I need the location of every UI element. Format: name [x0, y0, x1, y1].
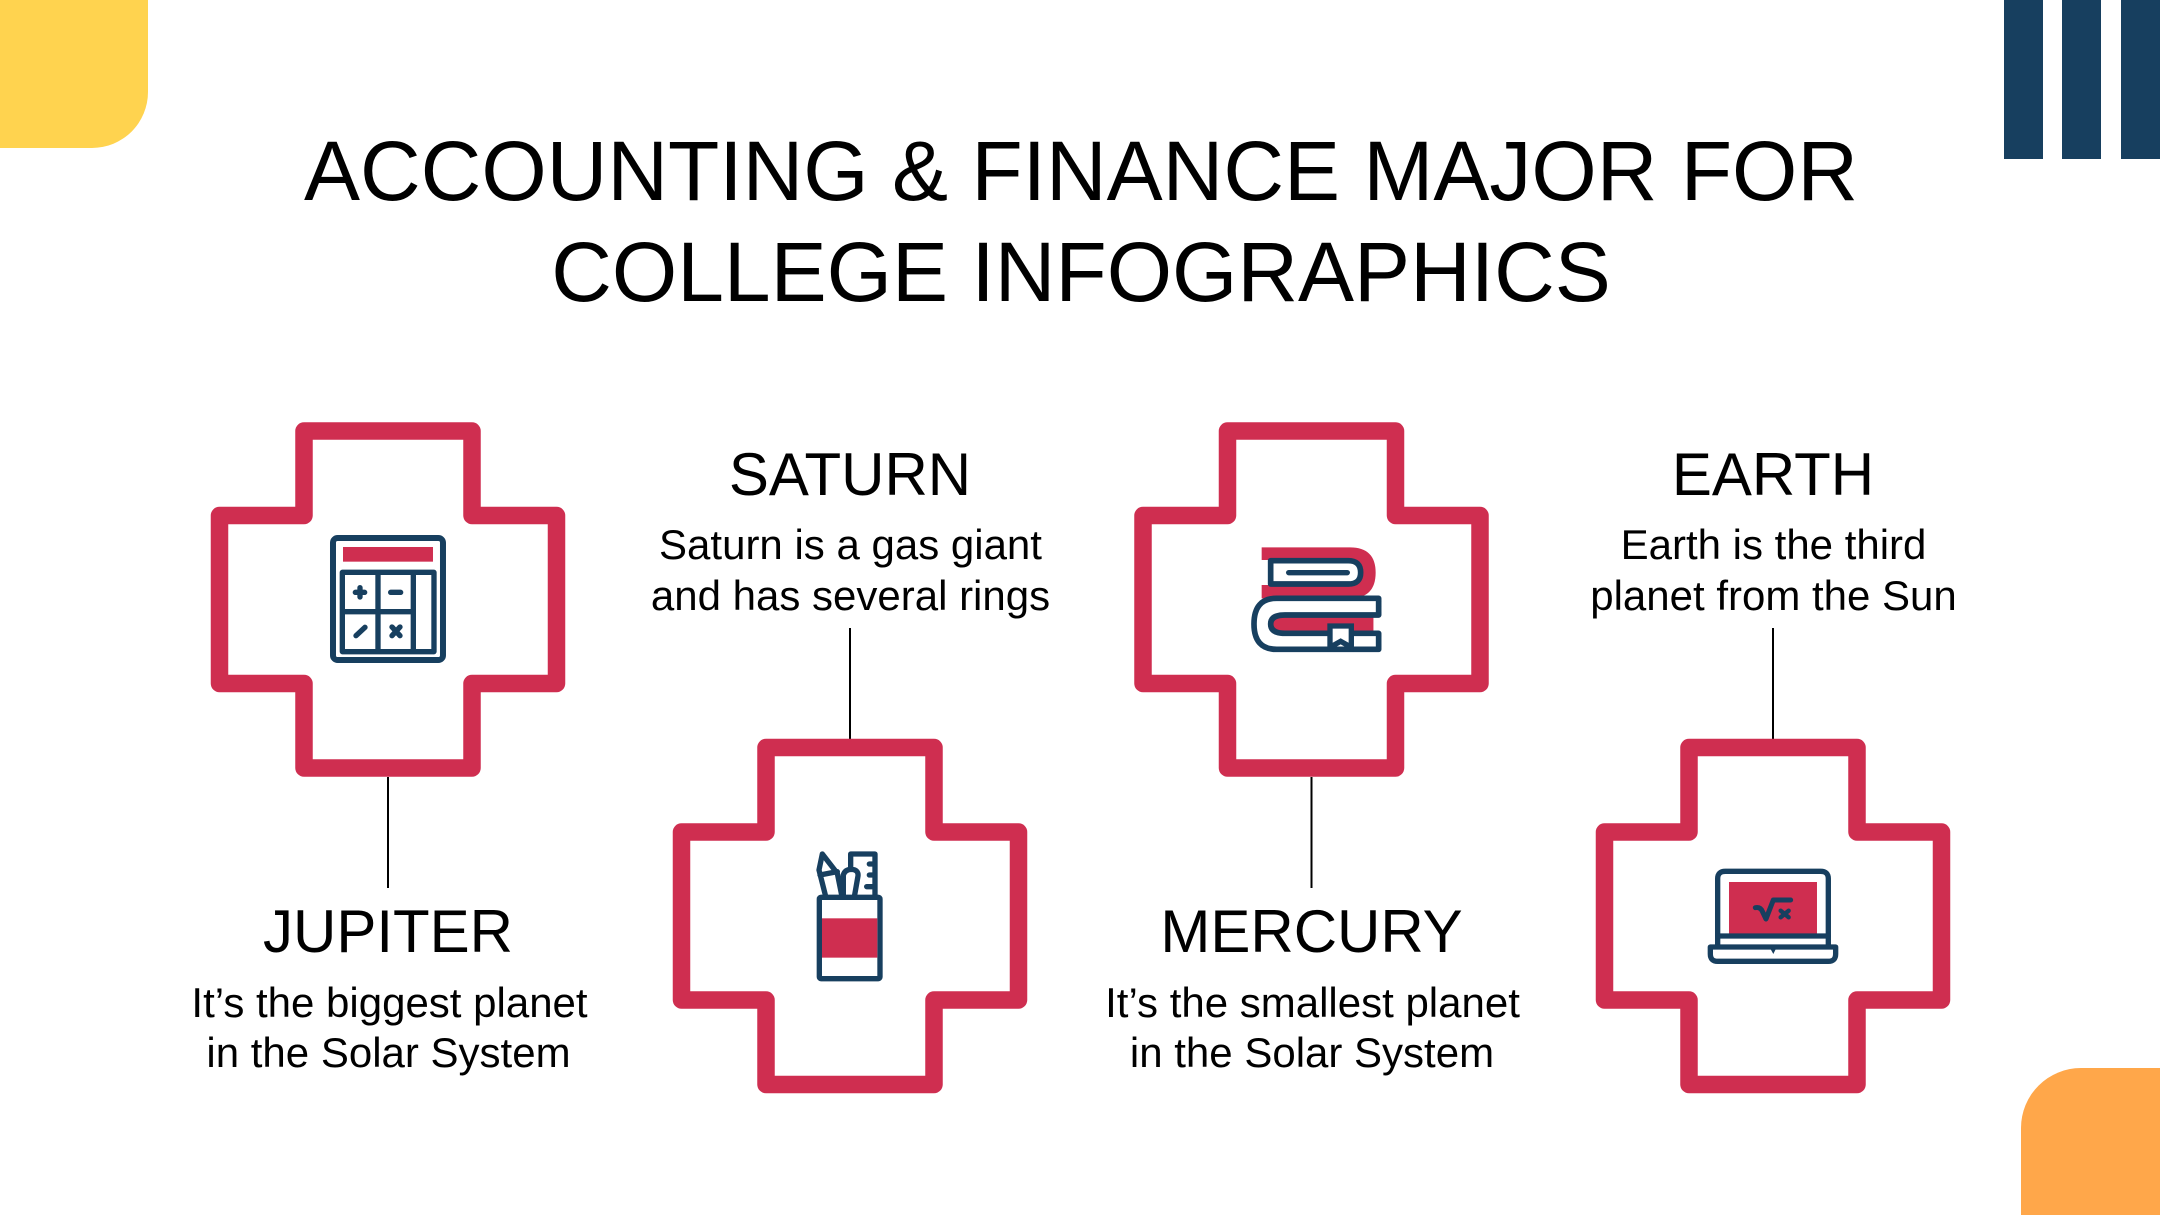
panel: Mercury: [1105, 431, 1520, 1076]
description: Saturn: [651, 521, 1050, 619]
decoration: navy bars: [2004, 0, 2160, 159]
description: Saturn: Saturn is a gas giant: [659, 521, 1042, 568]
panel: Jupiter: [191, 431, 588, 1076]
cross frame: Saturn: [682, 748, 1018, 1084]
heading: Saturn: SATURN: [729, 441, 971, 508]
heading: Mercury: MERCURY: [1160, 898, 1463, 965]
description: Jupiter: It’s the biggest planet: [191, 979, 588, 1026]
connector line: Mercury: [1310, 777, 1312, 888]
description: Mercury: It’s the smallest planet: [1105, 979, 1520, 1026]
cross frame: Mercury: [1143, 431, 1480, 768]
connector line: Jupiter: [387, 777, 389, 888]
description: Earth: [1590, 521, 1957, 619]
panel: Saturn: [651, 441, 1050, 1084]
title: ACCOUNTING & FINANCE MAJOR FOR: [304, 124, 1858, 218]
heading: Jupiter: JUPITER: [263, 898, 513, 965]
icon: books: [1254, 547, 1379, 649]
decoration: yellow corner: [0, 0, 148, 148]
description: Jupiter: [191, 979, 588, 1076]
decoration: orange corner: [2021, 1068, 2160, 1215]
panel: Earth: [1590, 441, 1957, 1084]
icon: calculator: [333, 538, 443, 660]
connector line: Earth: [1772, 628, 1774, 740]
heading: Earth: EARTH: [1672, 441, 1874, 508]
description: Mercury: [1105, 979, 1520, 1076]
connector line: Saturn: [849, 628, 851, 740]
description: Earth: Earth is the third: [1621, 521, 1926, 568]
description: Earth: planet from the Sun: [1590, 572, 1957, 619]
cross frame: Earth: [1604, 748, 1942, 1084]
description: Saturn: and has several rings: [651, 572, 1050, 619]
title: [304, 124, 1858, 319]
cross frame: Jupiter: [220, 431, 556, 768]
icon: laptop: [1710, 871, 1836, 961]
title: COLLEGE INFOGRAPHICS: [551, 225, 1611, 319]
description: Mercury: in the Solar System: [1130, 1029, 1494, 1076]
description: Jupiter: in the Solar System: [206, 1029, 571, 1076]
icon: pencil cup: [819, 854, 880, 979]
